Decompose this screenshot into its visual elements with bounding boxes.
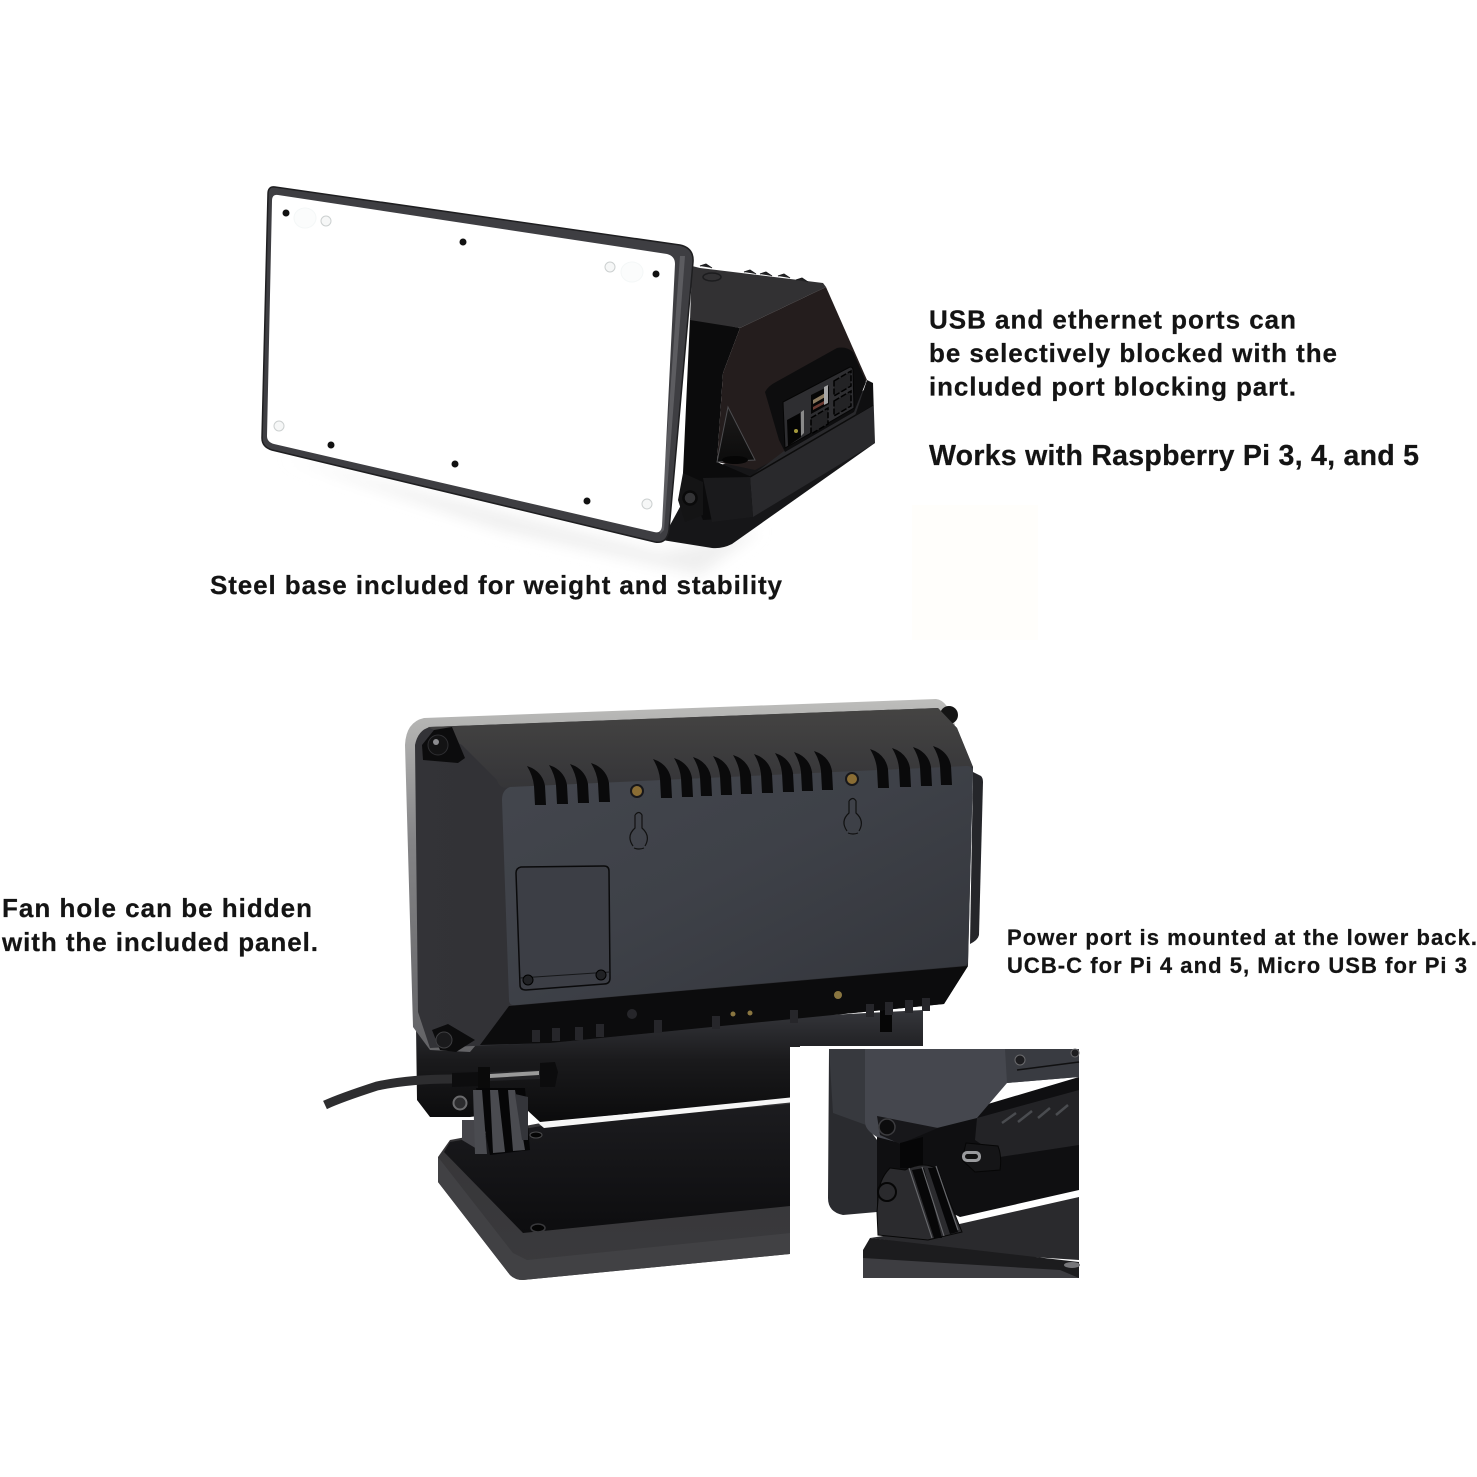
corner cone: [717, 407, 755, 462]
side screw: [454, 1096, 466, 1110]
blocked port slots: [811, 371, 851, 434]
inset corner screw: [877, 1116, 938, 1144]
enclosure ledge: [750, 383, 875, 517]
inset vents: [1002, 1105, 1068, 1123]
brass screw holes: [631, 773, 858, 797]
bottom-left corner screw: [432, 1024, 475, 1052]
inset display rear: [828, 1049, 877, 1215]
lower vents: [532, 991, 930, 1042]
mounting screw bracket: [678, 473, 703, 522]
rear enclosure: [678, 264, 875, 522]
inset rear plate: [865, 1049, 1079, 1143]
text block: port blocking: be selectively blocked with the: [929, 338, 1337, 368]
faint screws: [274, 208, 652, 509]
product photo: front view with steel base: [262, 187, 875, 575]
ethernet port: [787, 413, 801, 446]
power cable: [325, 1062, 558, 1105]
port opening: [765, 348, 866, 452]
text block: fan hole: Fan hole can be hidden: [2, 893, 312, 923]
stand base: [438, 1098, 800, 1280]
cooling vents: [527, 746, 952, 805]
white inset background: [790, 1047, 1080, 1279]
product photo: rear view: [325, 699, 983, 1280]
enclosure sloped face: [717, 287, 867, 470]
text block: port blocking: USB and ethernet ports can: [929, 304, 1296, 334]
lower black face: [480, 966, 968, 1045]
inset: power port close-up: [790, 1047, 1080, 1279]
text block: port blocking: included port blocking part.: [929, 372, 1296, 402]
right side tab: [970, 772, 983, 944]
white screen panel: [267, 195, 675, 532]
display housing: [405, 699, 983, 1110]
text block: port blocking: [929, 304, 1337, 402]
hinge arm: [462, 1088, 530, 1155]
white gap above base: [538, 1097, 795, 1128]
screen frame: [262, 187, 693, 542]
text block: fan hole: [1, 893, 318, 957]
light rim: [405, 699, 955, 1052]
keyhole marks: [630, 798, 861, 849]
USB port: [811, 386, 829, 414]
text block: power port: [1007, 925, 1477, 978]
steel base plate: [662, 430, 875, 548]
inset black body: [877, 1077, 1079, 1217]
inset base: [863, 1197, 1080, 1278]
stand bracket: [416, 1010, 923, 1122]
frame side highlight: [660, 256, 685, 534]
top-left corner screw: [422, 727, 465, 763]
soft shadow: [285, 458, 760, 575]
caption: steel base: Steel base included for weight and stability: [210, 570, 783, 600]
housing top face: [428, 708, 973, 788]
text block: fan hole: with the included panel.: [1, 927, 318, 957]
heading: compatibility: Works with Raspberry Pi 3, 4, and 5: [929, 440, 1419, 472]
inset fan cover screws: [1015, 1055, 1025, 1065]
inset hinge arm: [877, 1165, 962, 1240]
inset hinge screw: [878, 1183, 896, 1201]
USB-C port: [962, 1143, 1001, 1172]
text block: power port: UCB-C for Pi 4 and 5, Micro USB for Pi 3: [1007, 953, 1467, 978]
enclosure top surface: [690, 266, 826, 328]
enclosure lower side: [683, 318, 754, 520]
rear plate: [502, 766, 973, 1005]
text block: power port: Power port is mounted at the lower back.: [1007, 925, 1477, 950]
housing side: [415, 708, 973, 1048]
mounting holes: [282, 210, 660, 504]
fan hole cover: [516, 866, 610, 990]
